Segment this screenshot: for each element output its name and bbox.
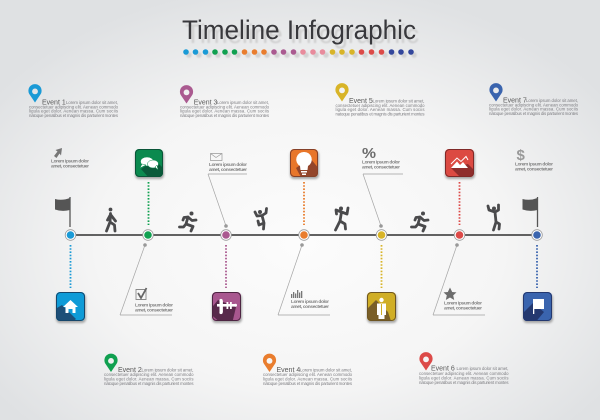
note: star: Lorem ipsum dolor (444, 300, 482, 306)
event 3 block (180, 85, 270, 118)
note: percent (362, 145, 403, 228)
icon box: flag (518, 292, 553, 324)
node: event 6 (454, 230, 465, 240)
pin: event 4 (263, 354, 276, 372)
node: event 7 (532, 230, 542, 240)
icon box: light bulb (290, 149, 320, 179)
icon: cheering figure (488, 205, 500, 230)
event 4 block: Lorem ipsum dolor sit amet, (300, 368, 352, 372)
node: event 4 (299, 230, 309, 240)
event 7 block: natoque penatibus et magnis dis parturient montes (489, 111, 578, 116)
icon: percent: % (362, 145, 376, 162)
event 3 block: ligula eget dolor. Aenean massa. Cum sociis (180, 109, 269, 114)
event 1 block: Event 1 (42, 100, 66, 106)
dotted color strip (183, 49, 417, 58)
event 5 block: Lorem ipsum dolor sit amet, (372, 98, 424, 104)
event 5 block: ligula eget dolor. Aenean massa. Cum sociis (336, 107, 424, 112)
event 1 block (28, 84, 119, 118)
event 1 block: consectetuer adipiscing elit. Aenean commodo (29, 104, 119, 109)
glyph: puzzle (217, 299, 237, 314)
pin: event 7 (489, 83, 503, 102)
icon: climbing figure (336, 206, 348, 230)
note: arrow: amet, consectetuer (51, 164, 89, 170)
note: bar chart: amet, consectetuer (291, 304, 329, 310)
event 4 block: Event 4 (276, 367, 300, 374)
event 2 block (104, 354, 194, 386)
title: Timeline Infographic (182, 15, 416, 45)
dotted connector: blue (70, 245, 72, 288)
node: event 1 (65, 230, 76, 240)
event 4 block: natoque penatibus et magnis dis parturient montes (263, 381, 352, 386)
event 5 block: consectetuer adipiscing elit. Aenean commodo (336, 103, 425, 108)
glyph: mountain chart (451, 156, 468, 168)
icon: running figure 2 (412, 212, 428, 231)
icon: finish flag (522, 197, 538, 227)
event 3 block: consectetuer adipiscing elit. Aenean commodo (180, 104, 270, 109)
icon: star (444, 288, 456, 300)
event 6 block: Event 6 (431, 366, 455, 372)
event 2 block: Event 2 (118, 367, 142, 374)
event 6 block: Lorem ipsum dolor sit amet, (456, 366, 508, 371)
event 5 block: natoque penatibus et magnis dis parturient montes (336, 112, 424, 117)
icon box: businessman (362, 292, 397, 324)
glyph: house (63, 300, 78, 313)
event 2 block: ligula eget dolor. Aenean massa. Cum sociis (104, 376, 194, 382)
event 5 block (335, 83, 425, 117)
note: arrow: Lorem ipsum dolor (51, 158, 89, 164)
node: event 5 (376, 230, 387, 240)
event 6 block (419, 352, 509, 385)
note: checkbox: amet, consectetuer (135, 308, 173, 314)
event 4 block: ligula eget dolor. Aenean massa. Cum sociis (263, 376, 352, 382)
timeline axis (70, 234, 537, 236)
note: bar chart: Lorem ipsum dolor (291, 299, 329, 305)
icon: walking figure (106, 208, 116, 231)
event 1 block: ligula eget dolor. Aenean massa. Cum sociis (29, 109, 118, 114)
icon: start flag (55, 197, 70, 227)
dotted connector: yellow (380, 245, 382, 288)
dotted connector: green (148, 182, 150, 225)
icon box: home (50, 292, 86, 324)
icon: arrow (54, 148, 62, 158)
note: arrow (51, 148, 89, 170)
glyph: flag (533, 299, 544, 314)
event 6 block: consectetuer adipiscing elit. Aenean commodo (419, 371, 509, 376)
pin: event 6 (419, 352, 433, 370)
glyph: person (377, 298, 386, 319)
note: dollar: Lorem ipsum dolor (515, 162, 553, 168)
note: star: amet, consectetuer (444, 306, 482, 312)
note: envelope: Lorem ipsum dolor (209, 162, 247, 168)
note: star (433, 243, 485, 315)
event 2 block: natoque penatibus et magnis dis parturient montes (104, 381, 194, 386)
event 2 block: Lorem ipsum dolor sit amet, (142, 368, 194, 372)
event 7 block: consectetuer adipiscing elit. Aenean commodo (489, 102, 579, 107)
event 1 block: natoque penatibus et magnis dis parturient montes (29, 113, 118, 118)
event 4 block: consectetuer adipiscing elit. Aenean commodo (263, 372, 353, 377)
icon box: puzzle (208, 292, 242, 324)
icon: envelope (210, 154, 222, 160)
icon: checkbox (136, 290, 146, 300)
dotted connector: orange (303, 182, 305, 225)
note: envelope (208, 154, 247, 228)
pin: event 5 (335, 83, 349, 102)
title: Timeline Infographic (185, 19, 419, 49)
note: checkbox: Lorem ipsum dolor (135, 302, 173, 308)
icon box: chart (445, 149, 476, 179)
event 4 block (263, 354, 353, 386)
glyph: speech bubbles (140, 157, 158, 170)
event 2 block: consectetuer adipiscing elit. Aenean commodo (104, 372, 194, 377)
event 3 block: natoque penatibus et magnis dis parturient montes (180, 113, 269, 118)
note: percent: amet, consectetuer (362, 164, 400, 170)
icon: jumping figure (255, 208, 266, 229)
note: checkbox (120, 243, 173, 315)
event 6 block: ligula eget dolor. Aenean massa. Cum sociis (419, 376, 508, 380)
event 7 block: Lorem ipsum dolor sit amet, (526, 98, 578, 103)
dotted connector: red (458, 182, 460, 225)
note: envelope: amet, consectetuer (209, 167, 247, 173)
note: dollar (515, 147, 553, 172)
icon: running figure 1 (180, 212, 196, 231)
node: event 2 (143, 230, 153, 240)
event 6 block: natoque penatibus et magnis dis parturient montes (419, 380, 508, 385)
event 1 block: Lorem ipsum dolor sit amet, (66, 100, 118, 105)
pin: event 3 (180, 85, 193, 104)
icon: dollar: $ (516, 147, 526, 164)
dotted connector: navy (536, 245, 538, 288)
icon box: chat (135, 149, 165, 179)
note: dollar: amet, consectetuer (515, 166, 553, 172)
note: bar chart (278, 243, 330, 315)
dotted connector: purple (225, 245, 227, 288)
event 7 block (489, 83, 579, 116)
pin: event 1 (28, 84, 42, 102)
event 7 block: ligula eget dolor. Aenean massa. Cum sociis (489, 107, 578, 112)
event 5 block: Event 5 (349, 98, 373, 105)
pin: event 2 (104, 354, 118, 372)
event 3 block: Lorem ipsum dolor sit amet, (217, 100, 269, 105)
glyph: bulb (296, 152, 312, 175)
event 7 block: Event 7 (503, 98, 527, 104)
event 3 block: Event 3 (194, 100, 218, 106)
note: percent: Lorem ipsum dolor (362, 160, 400, 166)
icon: small bars (291, 290, 302, 298)
node: event 3 (221, 230, 231, 240)
